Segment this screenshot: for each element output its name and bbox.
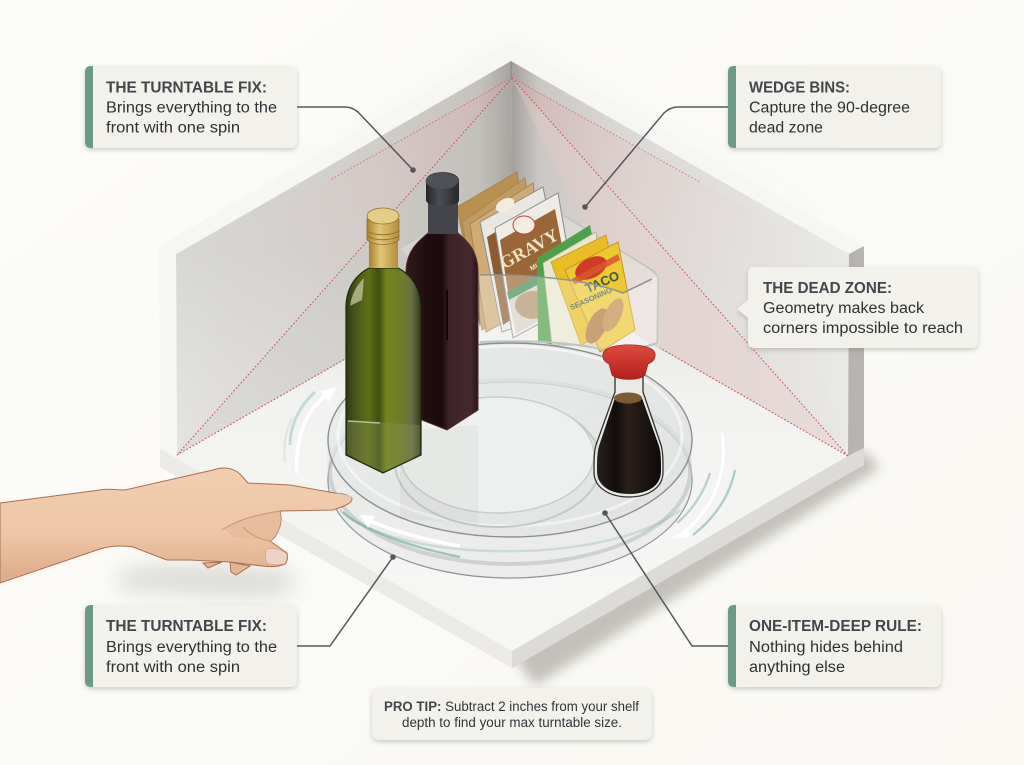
callout: the turntable fix (bottom): THE TURNTABLE FIX: — [106, 618, 267, 635]
pink dead zone shading — [177, 78, 848, 456]
callout: one-item-deep rule: Nothing hides behind — [749, 639, 903, 656]
callout: wedge bins: Capture the 90-degree — [749, 100, 910, 116]
arrow bottom — [343, 512, 460, 557]
rotation arrows — [284, 387, 735, 557]
callout: the turntable fix (bottom): front with one spin — [106, 659, 240, 676]
bin front — [480, 275, 658, 350]
front left edge — [160, 449, 512, 668]
pro tip: depth to find your max turntable size. — [402, 715, 622, 730]
bin back edges — [400, 215, 658, 343]
taco seasoning packet: TACO — [583, 268, 622, 296]
fingernail — [336, 493, 352, 500]
floor surface — [160, 265, 848, 651]
callout: one-item-deep rule: ONE-ITEM-DEEP RULE: — [749, 618, 922, 635]
taco seasoning packet: SEASONING — [569, 285, 614, 312]
callout: the turntable fix (top): THE TURNTABLE FIX: — [106, 80, 267, 96]
front right edge — [512, 448, 864, 668]
green and cream packets — [537, 225, 608, 345]
leader: turntable fix top — [297, 107, 416, 173]
leader: one item deep — [602, 510, 728, 646]
callout: wedge bins — [728, 66, 941, 148]
top rim — [159, 42, 864, 254]
callout: wedge bins: dead zone — [749, 120, 823, 136]
callout: one-item-deep rule — [728, 605, 941, 687]
taco seasoning packet — [565, 242, 635, 352]
callout: the dead zone — [737, 267, 978, 348]
left column face — [159, 246, 177, 455]
callout: wedge bins: WEDGE BINS: — [749, 80, 850, 96]
left wall — [176, 61, 512, 455]
callout: the dead zone: Geometry makes back — [763, 300, 924, 317]
callout: the turntable fix (bottom) — [85, 605, 297, 687]
yellow packet back — [551, 235, 625, 345]
right column face — [848, 246, 864, 456]
leader lines — [297, 107, 728, 646]
callout: the turntable fix (top): front with one spin — [106, 120, 240, 136]
white packet — [480, 187, 568, 332]
hand shadow — [120, 564, 296, 598]
dark vinegar bottle — [406, 172, 478, 430]
soy sauce bottle — [594, 345, 663, 497]
olive oil bottle — [346, 208, 421, 473]
arrow left — [284, 387, 337, 473]
right wall — [511, 61, 849, 456]
dotted dead zone lines — [177, 78, 848, 456]
pro tip — [372, 688, 652, 740]
callout: the dead zone: corners impossible to reach — [763, 320, 963, 337]
pro tip: PRO TIP: Subtract 2 inches from your shelf — [384, 699, 639, 714]
wedge bin with seasoning packets — [400, 172, 658, 352]
leader: wedge bins — [582, 107, 728, 210]
callout: one-item-deep rule: anything else — [749, 659, 845, 676]
callout: the turntable fix (top) — [85, 66, 297, 148]
hand pointing at turntable — [0, 468, 352, 583]
brown packets — [457, 172, 545, 332]
shelf shadow — [150, 34, 880, 686]
turntable — [327, 343, 692, 578]
callout: the turntable fix (top): Brings everything to the — [106, 100, 277, 116]
gravy packet: MIX — [529, 260, 544, 273]
gravy packet — [495, 193, 577, 338]
callout: the turntable fix (bottom): Brings everything to the — [106, 639, 277, 656]
gravy packet: GRAVY — [496, 225, 562, 273]
thumbnail — [266, 548, 287, 565]
corner shelf structure — [159, 42, 864, 668]
arrow right — [668, 433, 735, 539]
callout: the dead zone: THE DEAD ZONE: — [763, 280, 892, 297]
leader: turntable fix bottom — [297, 554, 396, 646]
